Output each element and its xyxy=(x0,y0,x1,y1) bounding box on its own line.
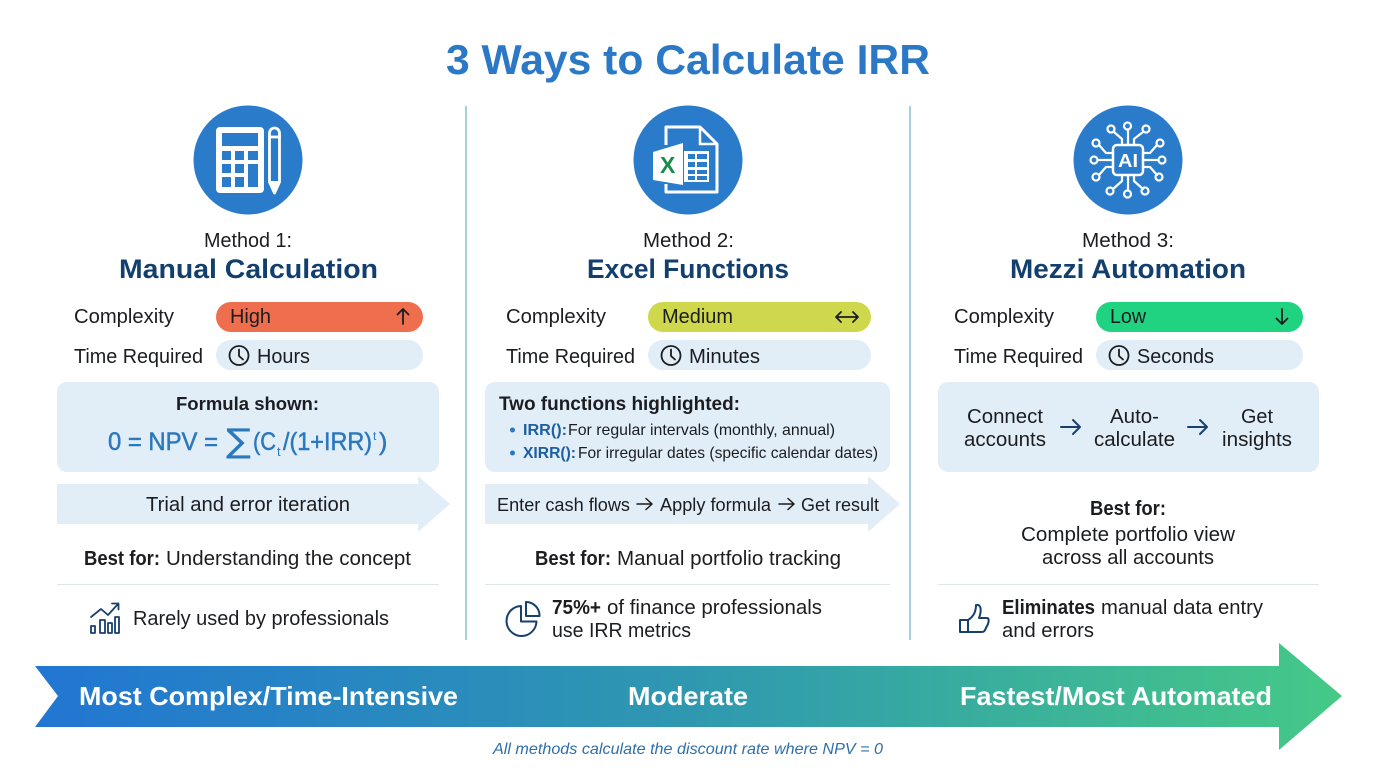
icon: AI chip: AI xyxy=(1118,151,1138,171)
functions box: IRR(): xyxy=(523,422,567,439)
complexity row xyxy=(506,302,871,332)
usage note xyxy=(507,597,822,642)
gradient spectrum arrow: Most Complex/Time-Intensive xyxy=(79,681,458,711)
workflow box: Connect xyxy=(967,406,1043,428)
workflow box xyxy=(938,382,1319,472)
workflow box: calculate xyxy=(1094,429,1175,451)
gradient spectrum arrow: Moderate xyxy=(628,681,748,711)
gradient spectrum arrow: Fastest/Most Automated xyxy=(960,681,1272,711)
method label: Method 2: xyxy=(643,230,734,252)
time required row xyxy=(74,340,423,370)
functions box: XIRR(): xyxy=(523,445,576,462)
usage note: Eliminates xyxy=(1002,597,1095,619)
method heading: Manual Calculation xyxy=(119,254,378,284)
usage note: manual data entry xyxy=(1101,597,1263,619)
footnote: All methods calculate the discount rate where NPV = 0 xyxy=(492,741,883,758)
functions box: For irregular dates (specific calendar dates) xyxy=(578,445,878,462)
best for: Complete portfolio view xyxy=(1021,524,1236,546)
formula box: (C xyxy=(253,428,276,456)
method label: Method 1: xyxy=(204,230,292,252)
best for: Best for: xyxy=(84,548,160,570)
complexity row: Complexity xyxy=(506,306,606,328)
process arrow xyxy=(57,476,450,532)
usage note: and errors xyxy=(1002,620,1094,642)
method label: Method 3: xyxy=(1082,230,1174,252)
icon: calculator and pencil xyxy=(194,106,302,214)
complexity row: Low xyxy=(1110,306,1147,328)
formula box: t xyxy=(373,429,377,443)
best for xyxy=(1021,498,1236,569)
usage note: of finance professionals xyxy=(607,597,822,619)
icon: excel spreadsheet xyxy=(634,106,742,214)
formula box xyxy=(57,382,439,472)
panel: method 3 mezzi automation xyxy=(938,106,1319,642)
process arrow: Trial and error iteration xyxy=(146,494,350,516)
icon: thumbs up xyxy=(960,605,989,632)
formula box: /(1+IRR) xyxy=(283,428,372,456)
workflow box: Get xyxy=(1241,406,1273,428)
best for: Manual portfolio tracking xyxy=(617,548,841,570)
complexity row: Complexity xyxy=(954,306,1054,328)
time required row: Time Required xyxy=(506,346,635,368)
complexity row xyxy=(74,302,423,332)
complexity row: Complexity xyxy=(74,306,174,328)
usage note: Rarely used by professionals xyxy=(133,608,389,630)
process arrow: Get result xyxy=(801,495,879,515)
panel: method 1 manual calculation xyxy=(57,106,450,633)
panel: method 2 excel functions xyxy=(485,106,900,642)
icon: pie chart xyxy=(507,602,540,636)
functions box: For regular intervals (monthly, annual) xyxy=(568,422,835,439)
method heading: Mezzi Automation xyxy=(1010,254,1246,284)
process arrow: Apply formula xyxy=(660,495,772,515)
formula box: ∑ xyxy=(226,421,251,460)
usage note: use IRR metrics xyxy=(552,620,691,642)
icon: excel spreadsheet: X xyxy=(660,152,676,178)
icon: bar chart with trend xyxy=(91,604,119,633)
process arrow xyxy=(485,476,900,532)
workflow box: insights xyxy=(1222,429,1292,451)
usage note xyxy=(960,597,1263,642)
method heading: Excel Functions xyxy=(587,254,789,284)
title: 3 Ways to Calculate IRR xyxy=(446,36,930,83)
complexity row xyxy=(954,302,1303,332)
time required row: Time Required xyxy=(74,346,203,368)
icon: AI chip xyxy=(1074,106,1182,214)
formula box: Formula shown: xyxy=(176,394,319,414)
workflow box: Auto- xyxy=(1110,406,1159,428)
time required row: Minutes xyxy=(689,346,760,368)
usage note xyxy=(91,604,389,633)
time required row: Seconds xyxy=(1137,346,1214,368)
formula box: ) xyxy=(379,428,387,456)
complexity row: High xyxy=(230,306,271,328)
time required row xyxy=(954,340,1303,370)
best for: across all accounts xyxy=(1042,547,1214,569)
gradient spectrum arrow xyxy=(35,643,1342,750)
complexity row: Medium xyxy=(662,306,733,328)
formula box: t xyxy=(277,444,281,459)
functions box xyxy=(485,382,890,472)
process arrow: Enter cash flows xyxy=(497,495,630,515)
best for: Best for: xyxy=(1090,498,1166,520)
time required row xyxy=(506,340,871,370)
time required row: Hours xyxy=(257,346,310,368)
functions box: Two functions highlighted: xyxy=(499,394,740,415)
formula box: 0 = NPV = xyxy=(108,428,218,456)
best for: Best for: xyxy=(535,548,611,570)
usage note: 75%+ xyxy=(552,597,601,619)
workflow box: accounts xyxy=(964,429,1046,451)
best for: Understanding the concept xyxy=(166,548,411,570)
time required row: Time Required xyxy=(954,346,1083,368)
